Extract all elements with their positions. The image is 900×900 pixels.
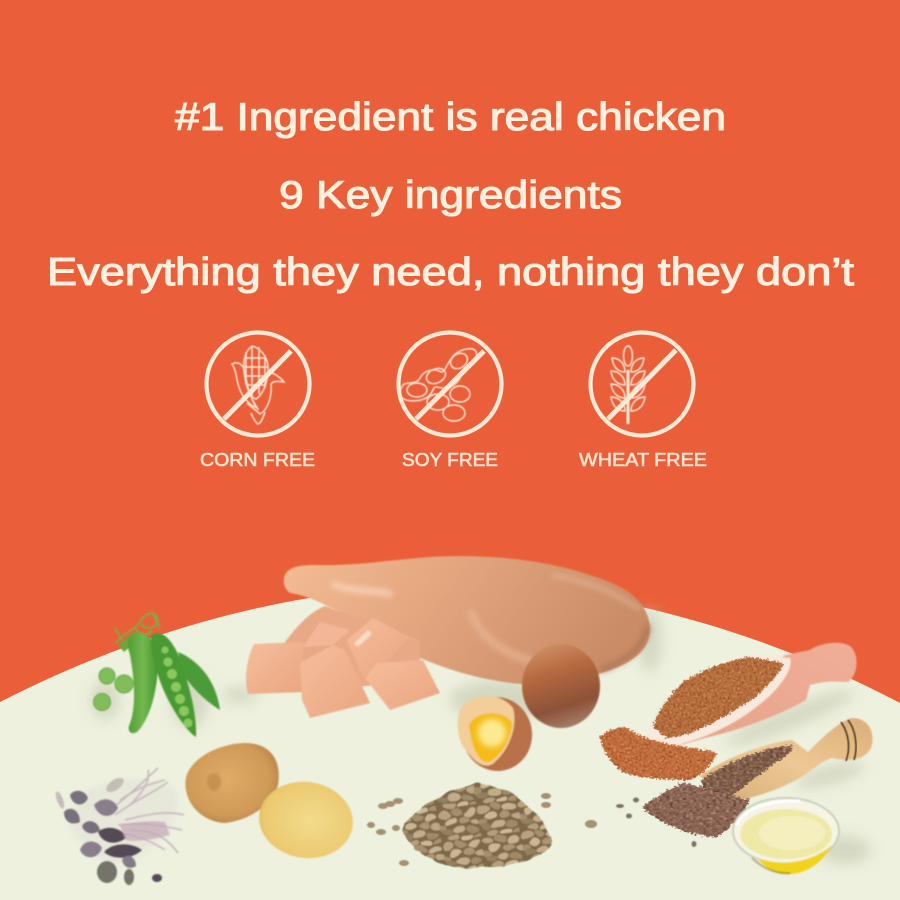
peas (94, 612, 220, 737)
scoop handle and body (680, 643, 857, 745)
loose flax seeds (616, 798, 696, 847)
pea pod left (128, 634, 158, 733)
label: wheat free: WHEAT FREE (579, 449, 707, 470)
wooden scoop (700, 718, 872, 802)
brown flax scoop (616, 718, 872, 847)
red flax scoop (600, 643, 857, 780)
brown flax in scoop (700, 745, 792, 798)
free-from badges (200, 332, 707, 470)
soft shadows (91, 608, 871, 864)
headline line 1: #1 Ingredient is real chicken (175, 96, 726, 139)
red flax in scoop (653, 657, 783, 738)
icon: corn free (206, 332, 310, 436)
label: soy free: SOY FREE (402, 449, 498, 470)
oil bowl (733, 798, 839, 874)
scoop rim (647, 654, 791, 748)
cream curved table surface (0, 585, 900, 900)
pea tendrils (115, 612, 160, 643)
lentils pile (367, 783, 597, 868)
icon: wheat free (590, 332, 694, 436)
loose lentils (367, 793, 597, 866)
headline line 2: 9 Key ingredients (279, 174, 622, 217)
potato slice (254, 776, 358, 864)
potatoes (185, 743, 358, 864)
ingredient photo group (54, 556, 872, 885)
headline text (47, 96, 854, 294)
icon: soy free (398, 332, 502, 436)
loose peas (94, 668, 133, 710)
pea pod right back (178, 652, 220, 710)
peas in pod (162, 646, 192, 728)
spilled red flax (600, 727, 717, 780)
pea pod open centre (151, 633, 196, 737)
whole potato (185, 743, 279, 823)
headline line 3: Everything they need, nothing they don’t (47, 251, 854, 294)
egg: cracked with yolk (456, 691, 538, 777)
egg: whole (522, 644, 600, 728)
microgreens (54, 768, 184, 885)
chicken cubes (246, 606, 440, 718)
spilled brown flax (642, 783, 750, 837)
label: corn free: CORN FREE (200, 449, 315, 470)
chicken breast (284, 556, 650, 684)
